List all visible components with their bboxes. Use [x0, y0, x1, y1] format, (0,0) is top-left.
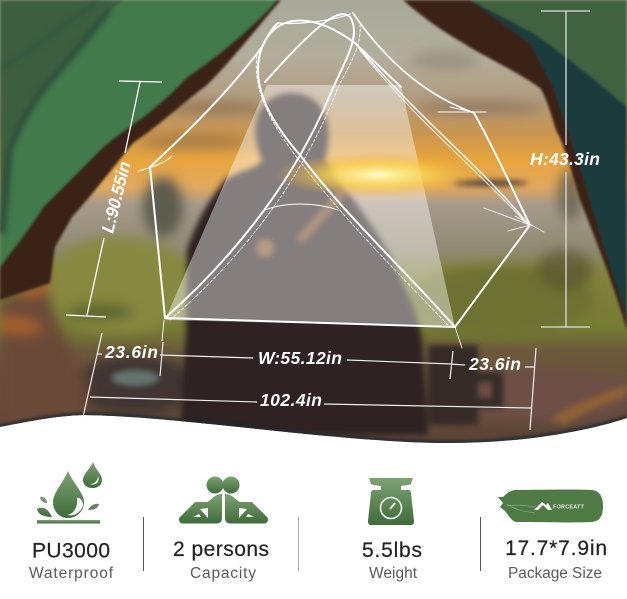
- divider: [480, 517, 481, 571]
- sun glow: [273, 153, 483, 197]
- icon: packed tent bag: [498, 490, 603, 522]
- divider: [143, 517, 144, 571]
- spec: package size: 17.7*7.9in: [505, 537, 607, 560]
- tent lining, right: [403, 0, 627, 330]
- dimension: length: [66, 81, 162, 317]
- dimension: width: W:55.12in: [258, 348, 342, 368]
- tent frame outline: [138, 13, 544, 348]
- mug: [428, 345, 503, 425]
- tent shadow panel, right: [470, 0, 627, 317]
- spec: capacity: Capacity: [190, 565, 256, 582]
- icon: two people back to back: [179, 476, 268, 524]
- dimension: length: L:90.55in: [97, 159, 135, 235]
- dimension: right side 23.6in: 23.6in: [468, 354, 521, 374]
- tent lining, left: [0, 0, 281, 300]
- icon: kitchen scale: [368, 478, 414, 525]
- divider: [298, 517, 299, 571]
- spec: capacity: 2 persons: [173, 538, 269, 561]
- dimension: total width: [83, 333, 536, 430]
- dimension: height: [530, 11, 600, 327]
- spec: weight: [362, 478, 422, 582]
- background photo: view from tent at sunset: [0, 0, 627, 445]
- dimension: left side 23.6in: 23.6in: [104, 342, 158, 362]
- spec: weight: 5.5lbs: [362, 539, 422, 562]
- icon: water drops: [37, 462, 102, 524]
- dimension: total width: 102.4in: [260, 390, 322, 410]
- rock at left foreground: [0, 288, 88, 430]
- spec: weight: Weight: [369, 565, 418, 582]
- spec: waterproof: Waterproof: [29, 565, 114, 582]
- spec: waterproof: PU3000: [32, 540, 110, 562]
- tent fabric, left: [0, 0, 277, 267]
- spec: package size: Package Size: [508, 565, 602, 582]
- spec: package size: FORCEATT: [553, 504, 585, 510]
- spec: package size: [498, 490, 607, 582]
- tent floor veil: [165, 85, 455, 327]
- tent fabric, right: [470, 0, 627, 107]
- trees on the horizon: [143, 177, 183, 237]
- spec: waterproof: [29, 462, 114, 582]
- dimension: width: [160, 342, 465, 379]
- dimension: height: H:43.3in: [530, 149, 600, 169]
- person silhouette: [180, 93, 428, 435]
- spec: capacity: [173, 476, 269, 582]
